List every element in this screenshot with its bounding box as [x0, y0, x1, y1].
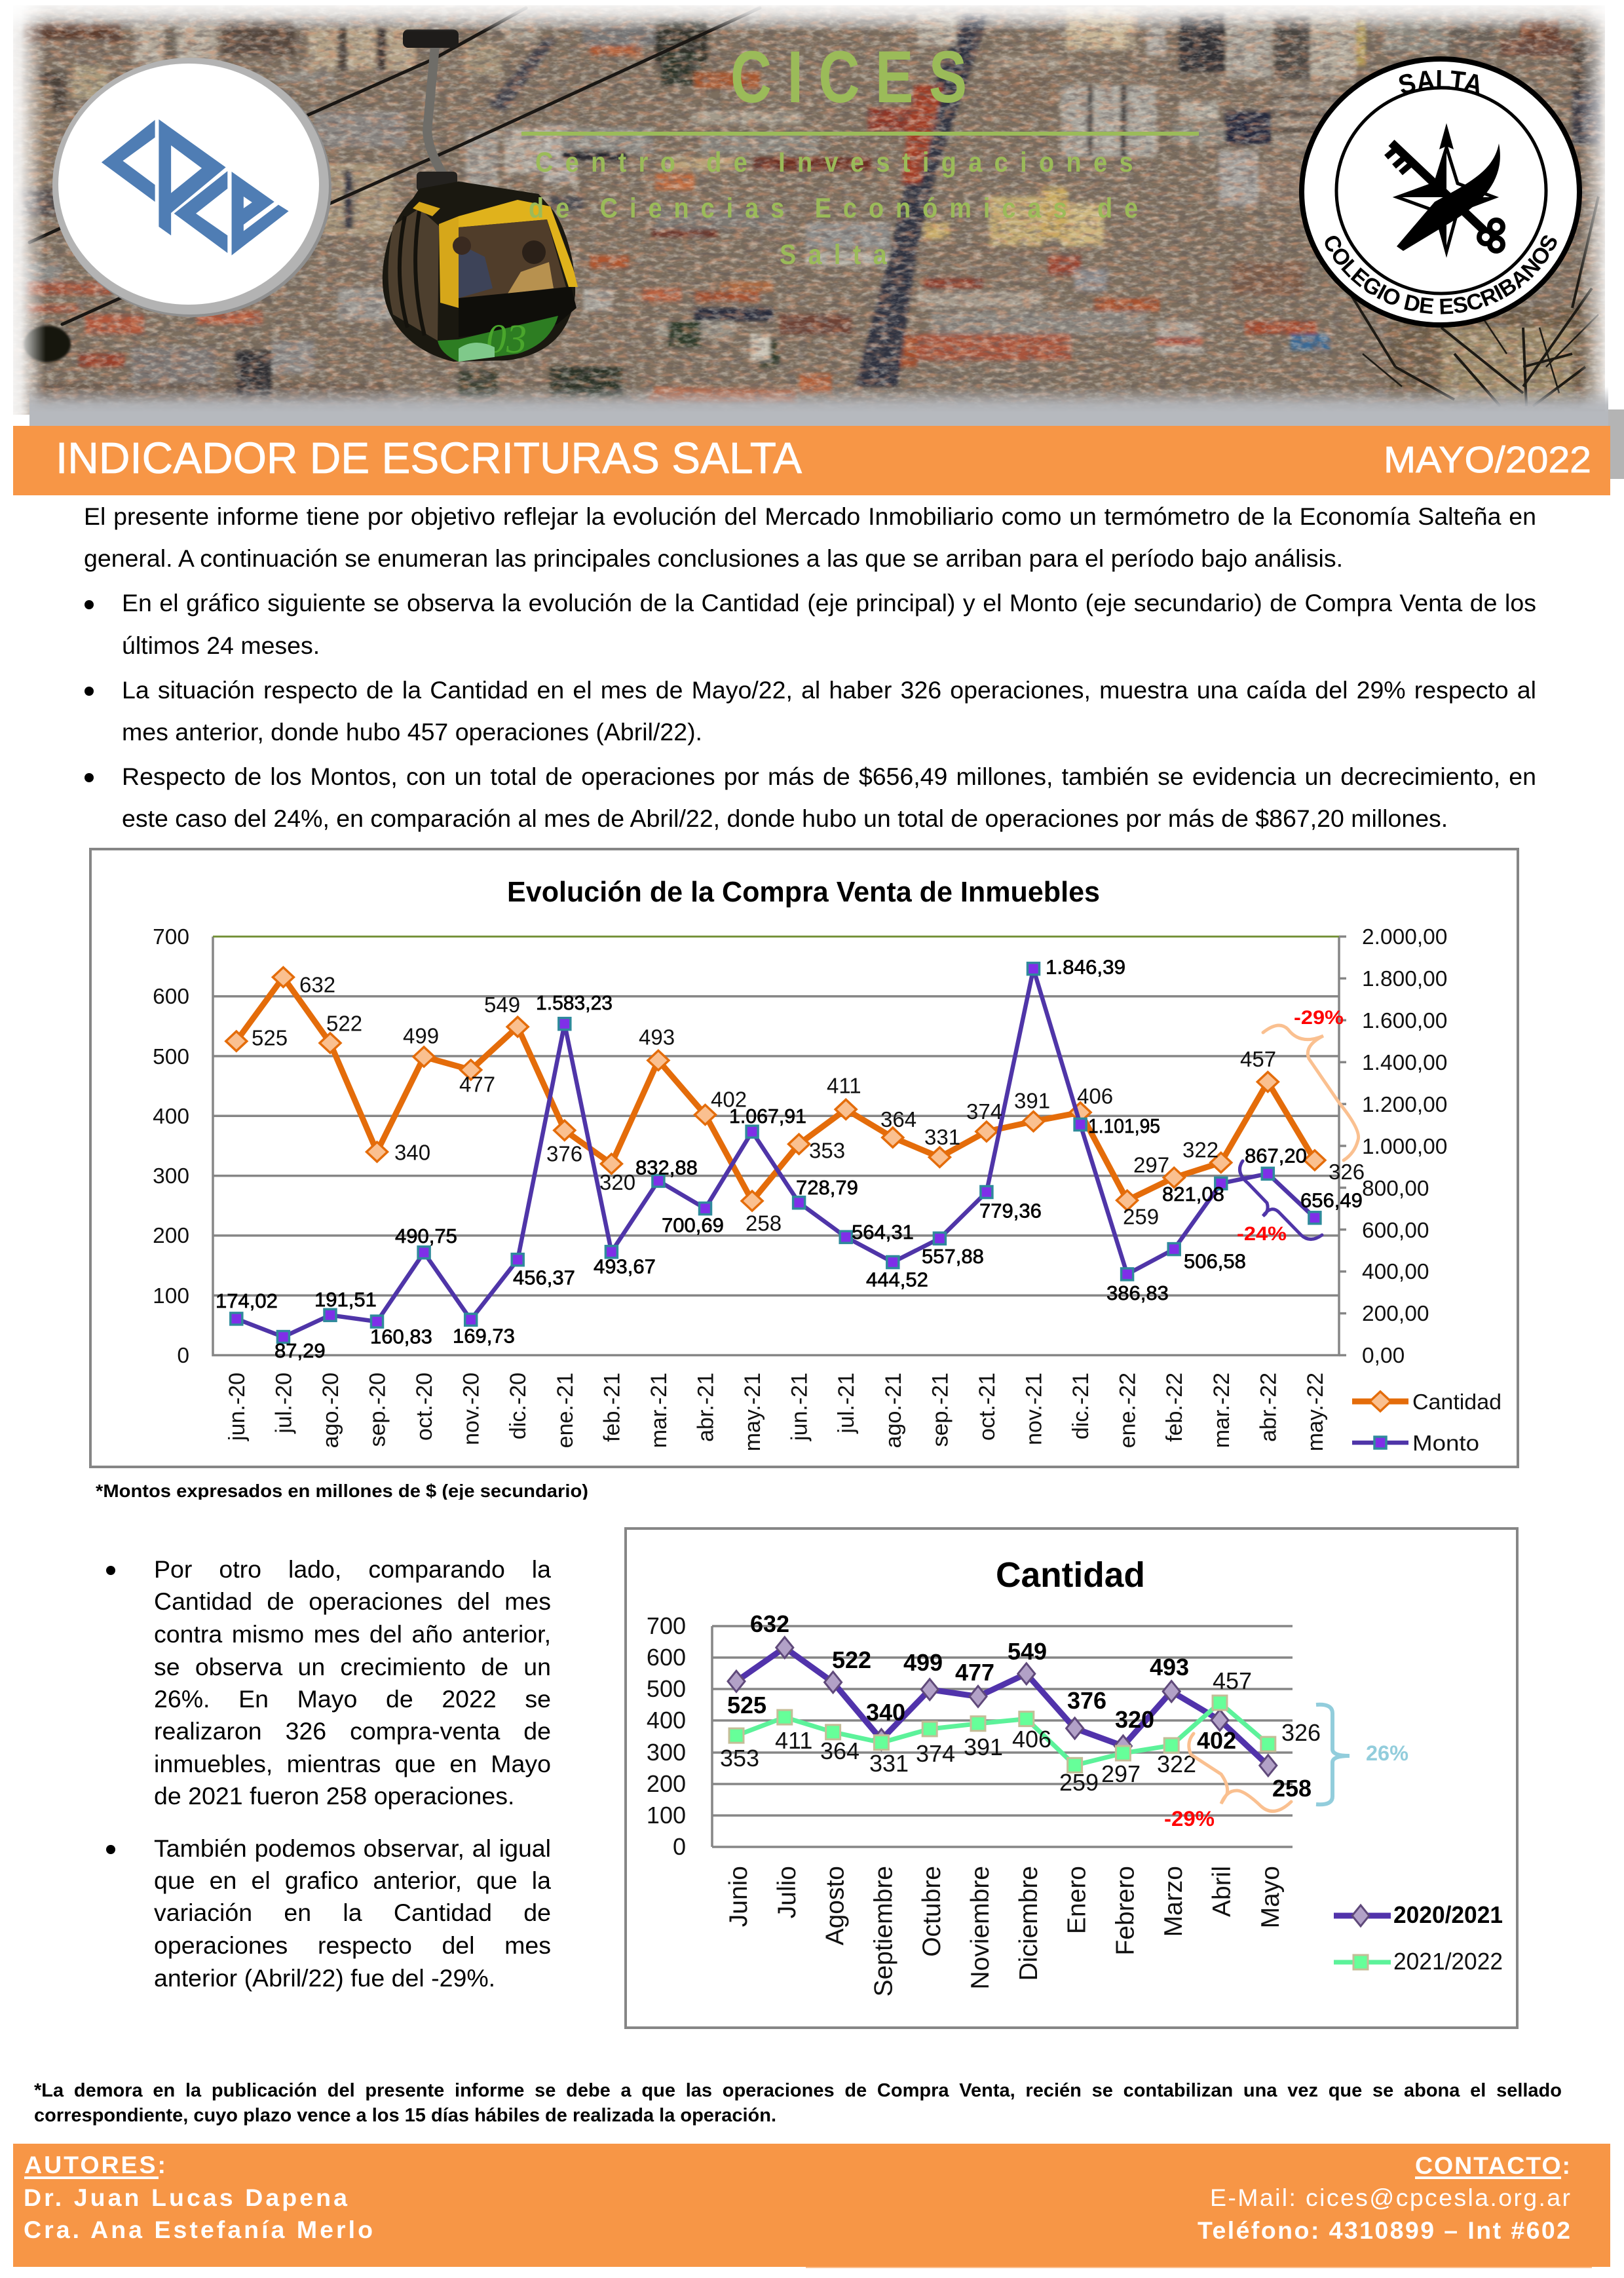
month axis labels: abr.-21	[693, 1373, 718, 1442]
data labels: Monto: 821,08	[1162, 1183, 1224, 1205]
data labels: Monto: 456,37	[513, 1266, 575, 1289]
month labels: Diciembre	[1015, 1866, 1043, 1981]
month labels: Marzo	[1160, 1866, 1188, 1937]
data labels: 2020/2021: 258	[1272, 1775, 1312, 1802]
legend: 2021/2022: 2021/2022	[1393, 1948, 1503, 1975]
footnote: *La demora en la publicación del presente informe se debe a que las operaciones de Compra Venta, recién se contabilizan una vez que se abona el sellado	[34, 2080, 1562, 2101]
data labels: Monto: 564,31	[852, 1221, 914, 1243]
data labels: Monto	[216, 956, 1363, 1362]
footnote	[34, 2080, 1562, 2126]
data labels: 2021/2022: 406	[1012, 1726, 1051, 1753]
footer bar	[13, 2144, 1610, 2268]
data labels: Monto: 490,75	[395, 1224, 457, 1247]
left axis labels: 500	[153, 1045, 189, 1069]
brace: -24% Monto	[1239, 1161, 1322, 1240]
data labels: Cantidad: 331	[924, 1125, 960, 1149]
month axis labels: dic.-20	[506, 1373, 531, 1439]
seal text top: SALTA	[1399, 70, 1479, 93]
data labels: Cantidad: 340	[394, 1140, 430, 1165]
data labels: Cantidad: 549	[484, 993, 520, 1017]
data labels: Monto: 728,79	[796, 1176, 858, 1199]
header title: CICES: CICES	[730, 37, 967, 119]
data labels: 2020/2021: 402	[1197, 1727, 1236, 1754]
data labels: Cantidad: 258	[746, 1211, 782, 1235]
month labels: Abril	[1208, 1866, 1236, 1917]
legend: 2020/2021: 2020/2021	[1393, 1901, 1503, 1928]
month axis labels: dic.-21	[1068, 1373, 1093, 1439]
data labels: Monto: 1.067,91	[729, 1105, 806, 1128]
data labels: 2020/2021: 632	[750, 1610, 789, 1637]
callout: -29%: -29%	[1164, 1807, 1215, 1831]
left axis labels: 100	[153, 1284, 189, 1308]
data labels: Monto: 506,58	[1184, 1250, 1246, 1273]
data labels: Monto: 557,88	[922, 1245, 984, 1268]
side text: year-on-year comparison: contra mismo mes del año anterior,	[154, 1620, 551, 1648]
data labels: 2020/2021: 320	[1115, 1706, 1154, 1733]
side text: year-on-year comparison: También podemos observar, al igual	[154, 1834, 551, 1862]
data labels: Cantidad: 259	[1123, 1204, 1159, 1228]
data labels: Monto: 779,36	[979, 1199, 1042, 1223]
chart: Evolución de la Compra Venta de Inmuebles	[90, 849, 1518, 1467]
intro and bullet text: La situación respecto de la Cantidad en el mes de Mayo/22, al haber 326 operaciones, muestra una caída del 29% respecto al	[122, 676, 1536, 704]
data labels: Cantidad: 477	[459, 1073, 495, 1097]
data labels: Monto: 656,49	[1300, 1189, 1363, 1212]
legend: Cantidad	[1352, 1390, 1501, 1414]
data labels: 2021/2022: 374	[916, 1740, 955, 1767]
authors: AUTORES:	[24, 2151, 166, 2178]
data labels: Cantidad: 411	[827, 1074, 861, 1098]
side text: year-on-year comparison: inmuebles, mientras que en Mayo	[154, 1750, 551, 1777]
intro and bullet text: general. A continuación se enumeran las principales conclusiones a las que se arriban para el período bajo análisis.	[84, 544, 1343, 572]
month labels: Octubre	[918, 1866, 946, 1957]
month axis labels: mar.-21	[647, 1373, 671, 1448]
cable car number: 03	[486, 317, 527, 362]
data labels: Monto: 87,29	[274, 1339, 326, 1362]
data labels: 2021/2022: 259	[1059, 1769, 1099, 1796]
right axis labels: 600,00	[1362, 1219, 1429, 1243]
data labels: Monto: 493,67	[594, 1255, 656, 1278]
month axis labels	[225, 1373, 1328, 1451]
right axis labels: 800,00	[1362, 1177, 1429, 1201]
intro and bullet text: Respecto de los Montos, con un total de operaciones por más de $656,49 millones, también se evidencia un decrecimiento, en	[122, 763, 1536, 790]
month axis labels: abr.-22	[1256, 1373, 1281, 1442]
data labels: Cantidad: 522	[326, 1012, 362, 1036]
side text: year-on-year comparison: que en el grafico anterior, que la	[154, 1867, 551, 1894]
side text: year-on-year comparison: anterior (Abril/22) fue del -29%.	[154, 1964, 495, 1992]
axis labels: 500	[647, 1675, 686, 1702]
intro and bullet text: En el gráfico siguiente se observa la evolución de la Cantidad (eje principal) y el Monto (eje secundario) de Compra Venta de los	[122, 589, 1536, 617]
month axis labels: oct.-20	[412, 1373, 437, 1441]
cables	[29, 8, 760, 324]
left axis labels: 400	[153, 1105, 189, 1129]
series: Monto	[231, 963, 1321, 1343]
data labels: 2020/2021: 549	[1008, 1638, 1047, 1665]
logo: Colegio de Escribanos seal	[1299, 56, 1582, 328]
data labels: Cantidad: 353	[809, 1139, 845, 1162]
data labels: 2020/2021: 376	[1067, 1687, 1106, 1714]
chart title: Evolución de la Compra Venta de Inmuebles	[507, 876, 1100, 908]
left axis labels: 0	[177, 1344, 189, 1368]
footnote: correspondiente, cuyo plazo vence a los 15 días hábiles de realizada la operación.	[34, 2105, 776, 2126]
month axis labels: ago.-20	[318, 1373, 343, 1448]
month axis labels: jun.-20	[225, 1373, 250, 1441]
left axis labels	[153, 925, 189, 1368]
left axis labels: 200	[153, 1224, 189, 1248]
header rule	[521, 132, 1199, 136]
legend: Monto: Monto	[1412, 1432, 1479, 1456]
header subtitle	[529, 146, 1138, 271]
intro and bullet text: últimos 24 meses.	[122, 632, 320, 659]
axis labels: 600	[647, 1644, 686, 1671]
seal text bottom: COLEGIO DE ESCRIBANOS	[1325, 235, 1557, 314]
month labels: Noviembre	[966, 1866, 994, 1990]
data labels: 2020/2021: 477	[955, 1659, 994, 1686]
data labels: 2020/2021	[727, 1610, 1312, 1802]
legend: Monto	[1352, 1432, 1479, 1456]
right axis labels: 1.000,00	[1362, 1135, 1447, 1159]
header subtitle: Salta	[780, 238, 887, 271]
chart title: Cantidad	[996, 1555, 1145, 1595]
month axis labels: sep.-20	[366, 1373, 390, 1447]
month labels: Febrero	[1111, 1866, 1139, 1956]
month labels: Agosto	[821, 1866, 850, 1945]
side text: year-on-year comparison: Cantidad de operaciones del mes	[154, 1587, 551, 1615]
side text: year-on-year comparison: 26%. En Mayo de 2022 se	[154, 1685, 551, 1713]
contact	[1198, 2152, 1570, 2244]
intro and bullet text	[84, 503, 1536, 832]
data labels: Cantidad: 493	[639, 1025, 675, 1050]
intro and bullet text: mes anterior, donde hubo 457 operaciones (Abril/22).	[122, 718, 702, 746]
data labels: Cantidad: 525	[252, 1026, 288, 1050]
axis labels	[647, 1612, 686, 1860]
axis labels: 300	[647, 1739, 686, 1766]
right axis labels: 400,00	[1362, 1260, 1429, 1284]
callout: -24%: -24%	[1237, 1223, 1287, 1245]
data labels: Cantidad: 320	[599, 1170, 635, 1194]
data labels: Cantidad: 376	[546, 1141, 582, 1166]
report title: INDICADOR DE ESCRITURAS SALTA	[56, 434, 802, 483]
month axis labels: jun.-21	[787, 1373, 812, 1441]
right axis labels	[1362, 925, 1447, 1368]
cable car	[383, 29, 578, 362]
month labels: Enero	[1063, 1866, 1091, 1934]
right axis labels: 200,00	[1362, 1302, 1429, 1326]
header photo: city of Salta with cable car	[0, 0, 1624, 479]
data labels: Cantidad: 364	[880, 1107, 916, 1131]
month labels	[725, 1866, 1285, 1996]
seal emblem	[1386, 123, 1503, 252]
data labels: Cantidad: 499	[403, 1023, 439, 1048]
month axis labels: may.-22	[1303, 1373, 1328, 1451]
header subtitle: Centro de Investigaciones	[535, 146, 1133, 178]
callout: 26%: 26%	[1366, 1741, 1408, 1765]
month axis labels: ene.-22	[1116, 1373, 1141, 1448]
month axis labels: feb.-21	[599, 1373, 624, 1442]
series: 2021/2022	[729, 1696, 1275, 1772]
month axis labels: jul.-20	[271, 1373, 296, 1434]
data labels: Cantidad: 297	[1133, 1152, 1169, 1177]
month axis labels: feb.-22	[1162, 1373, 1187, 1442]
legend: Cantidad: Cantidad	[1412, 1390, 1501, 1414]
month axis labels: sep.-21	[928, 1373, 953, 1447]
axis labels: 400	[647, 1707, 686, 1734]
data labels: 2021/2022: 457	[1213, 1667, 1252, 1694]
side text: year-on-year comparison	[106, 1555, 551, 1992]
dark bush	[24, 326, 71, 362]
data labels: 2021/2022: 322	[1157, 1751, 1196, 1777]
right axis labels: 1.400,00	[1362, 1051, 1447, 1075]
side text: year-on-year comparison: variación en la Cantidad de	[154, 1899, 551, 1926]
right axis labels: 1.800,00	[1362, 967, 1447, 991]
data labels: 2020/2021: 499	[903, 1649, 943, 1676]
data labels: Cantidad: 326	[1329, 1160, 1365, 1184]
month axis labels: ago.-21	[881, 1373, 906, 1448]
data labels: Monto: 700,69	[662, 1213, 724, 1236]
contact: E-Mail: cices@cpcesla.org.ar	[1210, 2184, 1570, 2211]
brace: -29% Cantidad	[1263, 1025, 1359, 1160]
month axis labels: may.-21	[740, 1373, 765, 1451]
data labels: Cantidad: 457	[1240, 1047, 1276, 1071]
authors: Dr. Juan Lucas Dapena	[24, 2184, 348, 2211]
contact: CONTACTO:	[1415, 2152, 1570, 2179]
data labels: Monto: 169,73	[453, 1324, 515, 1347]
side text: year-on-year comparison: realizaron 326 compra-venta de	[154, 1717, 551, 1745]
data labels: 2021/2022: 326	[1281, 1719, 1321, 1746]
contact: Teléfono: 4310899 – Int #602	[1198, 2216, 1570, 2244]
month axis labels: nov.-21	[1022, 1373, 1047, 1445]
right axis labels: 1.600,00	[1362, 1009, 1447, 1033]
right axis labels: 1.200,00	[1362, 1093, 1447, 1117]
left axis labels: 700	[153, 925, 189, 949]
month labels: Junio	[725, 1866, 753, 1927]
intro and bullet text: El presente informe tiene por objetivo reflejar la evolución del Mercado Inmobiliario como un termómetro de la Economía Salteña en	[84, 503, 1536, 530]
month axis labels: nov.-20	[459, 1373, 484, 1445]
data labels: Cantidad: 391	[1014, 1088, 1050, 1112]
data labels: Cantidad: 402	[711, 1087, 747, 1111]
header subtitle: de Ciencias Económicas de	[529, 192, 1138, 224]
data labels: 2021/2022: 331	[869, 1750, 909, 1777]
data labels: 2021/2022: 353	[720, 1745, 759, 1772]
month axis labels: oct.-21	[975, 1373, 1000, 1441]
left axis labels: 300	[153, 1164, 189, 1188]
left axis labels: 600	[153, 985, 189, 1009]
legend: 2021/2022	[1334, 1948, 1503, 1975]
report date: MAYO/2022	[1384, 439, 1591, 481]
data labels: 2021/2022: 297	[1101, 1760, 1141, 1787]
data labels: 2020/2021: 525	[727, 1692, 766, 1718]
side text: year-on-year comparison: Por otro lado, comparando la	[154, 1555, 551, 1583]
intro and bullet text: este caso del 24%, en comparación al mes de Abril/22, donde hubo un total de operaciones por más de $867,20 millones.	[122, 805, 1448, 832]
tree branches	[1343, 197, 1598, 406]
brace: 26%	[1316, 1705, 1350, 1804]
data labels: Monto: 1.583,23	[536, 991, 613, 1014]
month axis labels: ene.-21	[553, 1373, 578, 1448]
data labels: Monto: 832,88	[635, 1156, 698, 1179]
logo: CPCE	[52, 58, 331, 317]
data labels: Cantidad: 406	[1077, 1084, 1113, 1109]
legend: 2020/2021	[1334, 1901, 1503, 1928]
authors	[24, 2151, 373, 2243]
chart: Cantidad interanual	[626, 1528, 1517, 2028]
data labels: Monto: 1.846,39	[1046, 956, 1125, 979]
data labels: 2021/2022: 364	[820, 1737, 859, 1764]
chart note: *Montos expresados en millones de $ (eje secundario)	[96, 1481, 588, 1501]
axis labels: 200	[647, 1770, 686, 1797]
side text: year-on-year comparison: operaciones respecto del mes	[154, 1931, 551, 1959]
month axis labels: mar.-22	[1209, 1373, 1234, 1448]
brace: -29%	[1189, 1734, 1291, 1812]
axis labels: 0	[673, 1833, 686, 1860]
data labels: Monto: 160,83	[370, 1325, 432, 1348]
data labels: Monto: 386,83	[1106, 1281, 1169, 1304]
data labels: 2021/2022: 411	[775, 1727, 812, 1754]
data labels: 2021/2022: 391	[964, 1734, 1003, 1760]
data labels: Monto: 191,51	[314, 1288, 377, 1311]
axis labels: 700	[647, 1612, 686, 1639]
data labels: 2020/2021: 340	[866, 1699, 905, 1726]
month labels: Septiembre	[869, 1866, 897, 1996]
callout: -29%: -29%	[1294, 1007, 1344, 1029]
series: Cantidad	[226, 967, 1325, 1211]
data labels: Monto: 867,20	[1245, 1144, 1307, 1167]
data labels: 2021/2022	[720, 1667, 1321, 1796]
edge fades	[0, 0, 46, 432]
month axis labels: jul.-21	[834, 1373, 859, 1434]
data labels: Monto: 444,52	[866, 1268, 928, 1291]
month labels: Mayo	[1256, 1866, 1285, 1928]
data labels: Monto: 174,02	[216, 1289, 278, 1312]
data labels: Monto: 1.101,95	[1088, 1114, 1160, 1137]
data labels: 2020/2021: 493	[1150, 1654, 1189, 1680]
data labels: Cantidad: 374	[966, 1099, 1002, 1124]
side text: year-on-year comparison: de 2021 fueron 258 operaciones.	[154, 1782, 514, 1810]
month labels: Julio	[773, 1866, 801, 1918]
data labels: Cantidad	[252, 972, 1365, 1235]
right axis labels: 0,00	[1362, 1344, 1405, 1368]
data labels: 2020/2021: 522	[832, 1646, 871, 1673]
right axis labels: 2.000,00	[1362, 925, 1447, 949]
authors: Cra. Ana Estefanía Merlo	[24, 2216, 373, 2243]
data labels: Cantidad: 632	[299, 972, 335, 997]
title bar	[13, 426, 1610, 495]
side text: year-on-year comparison: se observa un crecimiento de un	[154, 1653, 551, 1680]
data labels: Cantidad: 322	[1182, 1138, 1218, 1162]
series: 2020/2021	[728, 1637, 1277, 1776]
axis labels: 100	[647, 1802, 686, 1829]
